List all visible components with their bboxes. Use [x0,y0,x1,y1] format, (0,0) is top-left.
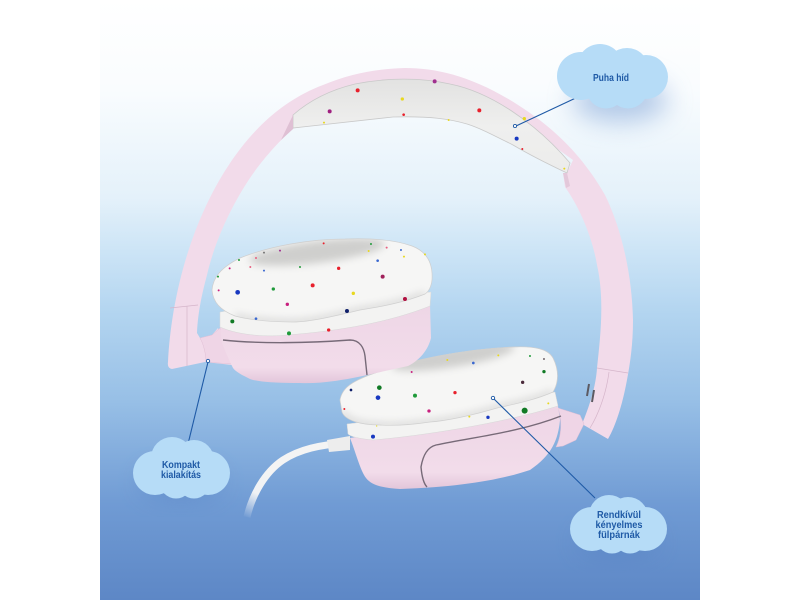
leader line [188,359,210,444]
label [596,510,643,541]
ear cup: front [340,337,561,489]
ear cup: back [212,233,432,383]
callout: Puha híd [513,44,668,128]
headband dots [323,79,565,170]
callout: Kompakt kialakítás [133,359,230,498]
leader line [513,96,580,128]
right arm joint lines [590,368,628,428]
label: Rendkívül [597,510,641,521]
callout: Kompakt kialakítás: kialakítás [161,470,201,481]
cloud [557,44,668,108]
label: Puha híd [593,72,629,84]
headband [168,68,633,439]
cloud [133,437,230,498]
leader line [491,396,595,498]
left hinge [200,328,232,364]
background panel [100,0,700,600]
label: Kompakt [162,460,201,471]
headphones [168,68,633,517]
cable [247,436,350,517]
left arm joint lines [170,305,198,366]
right hinge [556,408,584,447]
callout: Rendkívül kényelmes fülpárnák [491,396,667,556]
front cushion dots [343,354,549,439]
back cushion dots [217,242,426,335]
label: fülpárnák [598,530,640,541]
label: kényelmes [596,520,643,531]
cloud [570,495,667,554]
